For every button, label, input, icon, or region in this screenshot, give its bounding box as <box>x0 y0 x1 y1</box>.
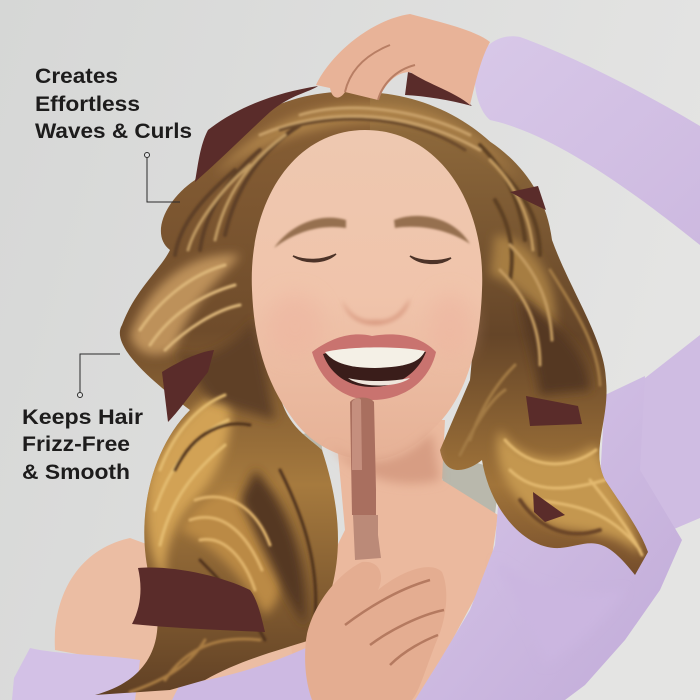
nose shadow <box>342 298 410 325</box>
hair right golden <box>497 430 640 555</box>
panel: bare shoulder <box>55 538 320 700</box>
hair left curl top <box>130 254 240 355</box>
ribbon right upper <box>510 186 546 210</box>
icon: lower hand <box>305 562 446 700</box>
ribbon right lower <box>533 492 565 522</box>
callout leader line <box>147 158 180 202</box>
callout: keeps hair frizz-free and smooth: Frizz-Free <box>22 433 130 456</box>
face shape <box>252 130 482 460</box>
hair golden center lower left <box>180 491 284 615</box>
ribbon top left <box>195 86 318 182</box>
hair golden lower left <box>147 385 231 590</box>
callout: keeps hair frizz-free and smooth: & Smooth <box>22 461 130 484</box>
panel: blouse ruffle shading <box>495 560 625 665</box>
callout: creates effortless waves and curls: Effortless <box>35 93 140 116</box>
icon: curling clip <box>350 398 381 560</box>
panel: raised arm sleeve <box>475 36 700 245</box>
teeth lower <box>348 378 410 386</box>
callout leader line <box>80 354 120 392</box>
icon: upper hand <box>316 14 490 105</box>
callout text: Keeps Hair <box>22 406 143 429</box>
mouth lips <box>312 334 436 400</box>
panel: blouse center <box>172 645 322 700</box>
panel: lowered arm sleeve <box>635 335 700 535</box>
ribbon bottom left <box>132 567 265 632</box>
callout: creates effortless waves and curls: Waves & Curls <box>35 120 192 143</box>
ribbon top right <box>405 72 472 106</box>
hair dark under curl <box>175 320 275 420</box>
hair dark near neck <box>240 470 306 625</box>
hair top highlight <box>220 100 510 171</box>
clip lower bar <box>353 515 381 560</box>
cheek blush right <box>428 293 472 357</box>
panel: hair <box>90 85 660 700</box>
callout text: Creates <box>35 65 118 88</box>
clip highlight <box>352 398 362 470</box>
hair right upper light <box>490 235 556 330</box>
panel: blouse right <box>415 376 682 700</box>
eyebrow right <box>394 216 470 244</box>
hair strands <box>130 108 642 692</box>
clip upper bar <box>350 398 376 515</box>
mouth inside <box>323 348 426 387</box>
eye closed left <box>293 254 336 262</box>
teeth upper <box>325 347 425 368</box>
callout: keeps hair frizz-free and smooth <box>22 354 143 484</box>
ribbon right middle <box>526 396 582 426</box>
eyebrow left <box>274 218 346 248</box>
chin shadow <box>330 432 440 484</box>
hair base <box>90 85 660 700</box>
panel: neck and chest <box>290 420 498 700</box>
hair dark right <box>520 300 590 395</box>
cheek blush left <box>267 293 323 357</box>
panel: gap behind hair <box>235 430 500 540</box>
panel: face <box>252 130 482 484</box>
panel: blouse left <box>12 648 140 700</box>
callout: creates effortless waves and curls <box>35 65 192 202</box>
eye closed right <box>410 256 451 263</box>
panel: ribbons <box>132 72 582 632</box>
ribbon left middle <box>162 350 214 422</box>
